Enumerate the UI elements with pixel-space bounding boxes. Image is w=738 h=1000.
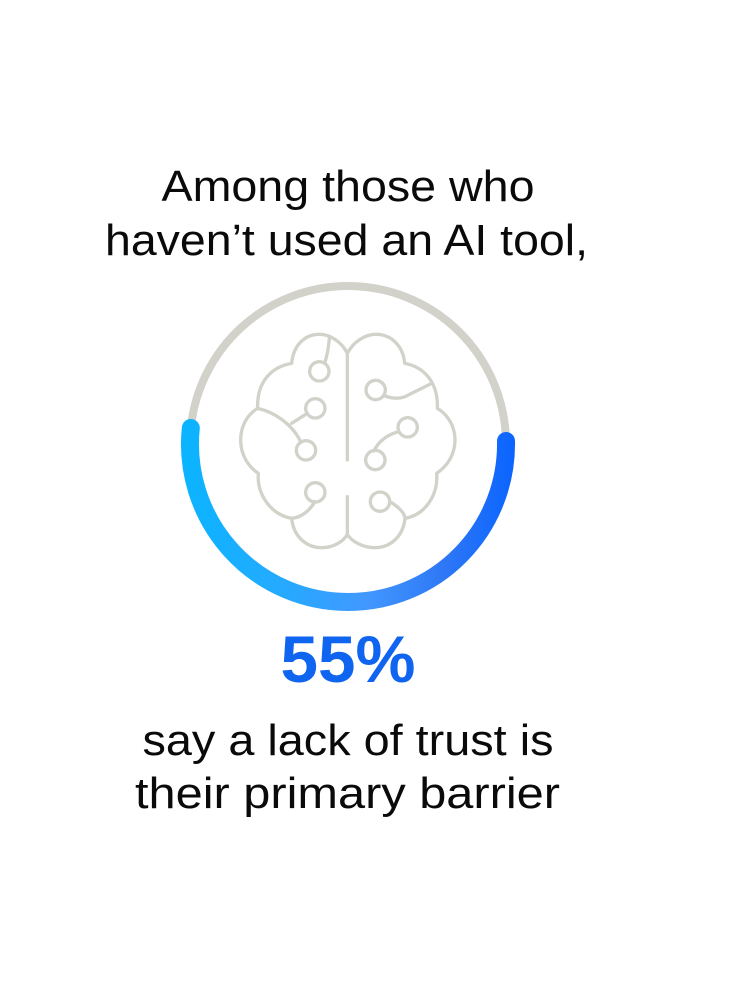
statistic: 55%: 55% (280, 622, 416, 696)
gauge ring (190, 286, 506, 602)
gauge value arc: 55% (190, 428, 506, 602)
heading: Among those who (162, 162, 534, 211)
icon: brain circuit (241, 334, 455, 548)
heading (105, 162, 588, 265)
caption: say a lack of trust is (142, 716, 554, 765)
caption (135, 716, 560, 818)
heading: haven’t used an AI tool, (105, 216, 588, 265)
caption: their primary barrier (135, 769, 560, 818)
gauge track (191, 286, 506, 441)
